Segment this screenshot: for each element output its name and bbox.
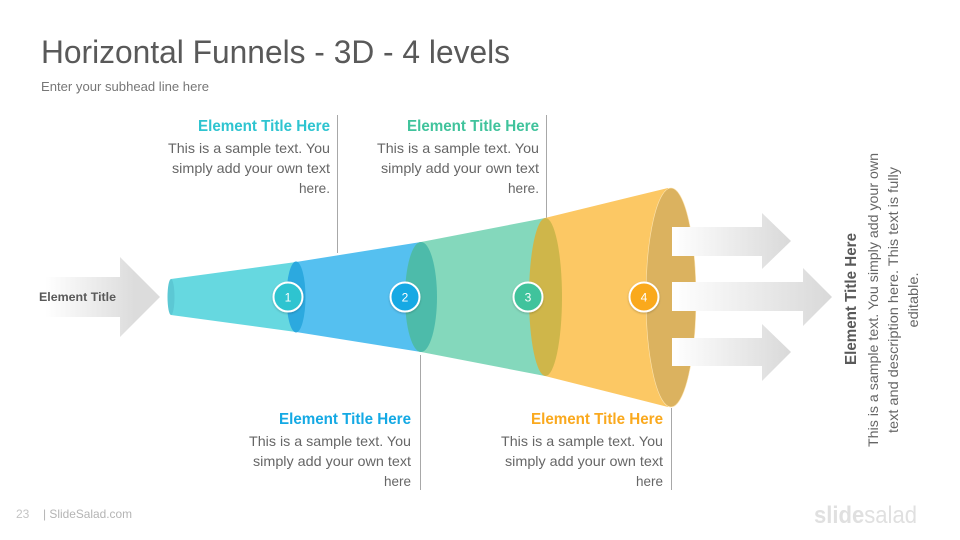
text block 4: simply add your own text <box>505 453 663 469</box>
step badge 1: 1 <box>285 290 292 304</box>
output arrow bottom <box>672 324 791 381</box>
title: Horizontal Funnels - 3D - 4 levels <box>41 34 510 70</box>
funnel ring 1 <box>286 262 306 332</box>
page number: 23 <box>16 507 30 521</box>
text block 4: here <box>636 473 663 489</box>
input arrow <box>39 257 160 337</box>
step badge 4 <box>630 282 658 312</box>
text block 1: here. <box>299 180 330 196</box>
funnel ring 2 <box>405 242 437 352</box>
funnel segment 2 <box>296 242 421 352</box>
text block 3: This is a sample text. You <box>377 140 539 156</box>
funnel opening 0 <box>168 279 174 315</box>
text block 1: Element Title Here <box>198 118 330 135</box>
rotated output text: Element Title Here <box>843 233 860 365</box>
output arrow top <box>672 213 791 269</box>
text block 2: Element Title Here <box>279 411 411 428</box>
text block 1: This is a sample text. You <box>168 140 330 156</box>
text block 2 <box>249 411 411 489</box>
text block 3: simply add your own text <box>381 160 539 176</box>
step badge 3: 3 <box>525 290 532 304</box>
step badge 3 <box>514 282 542 312</box>
footer source: | SlideSalad.com <box>43 507 132 521</box>
step badge 2: 2 <box>402 290 409 304</box>
funnel segment 3 <box>421 218 545 376</box>
output arrow middle <box>672 268 832 326</box>
step badge 2 <box>390 282 420 312</box>
funnel segment 4 <box>545 188 668 407</box>
text block 2: here <box>384 473 411 489</box>
text block 3: here. <box>508 180 539 196</box>
text block 3 <box>377 118 539 196</box>
text block 4: This is a sample text. You <box>501 433 663 449</box>
text block 2: simply add your own text <box>253 453 411 469</box>
funnel ring 3 <box>529 218 562 376</box>
leader lines <box>338 115 672 490</box>
text block 3: Element Title Here <box>407 118 539 135</box>
rotated output text: This is a sample text. You simply add your own <box>865 153 881 447</box>
step badge 4: 4 <box>641 290 648 304</box>
step badge 1 <box>274 282 302 312</box>
text block 4 <box>501 411 663 489</box>
input arrow label: Element Title <box>39 290 116 304</box>
funnel mouth <box>646 188 696 407</box>
rotated output text: editable. <box>905 272 921 328</box>
text block 4: Element Title Here <box>531 411 663 428</box>
text block 1: simply add your own text <box>172 160 330 176</box>
funnel <box>168 188 696 407</box>
rotated output text <box>843 153 921 447</box>
subhead: Enter your subhead line here <box>41 80 209 94</box>
text block 1 <box>168 118 330 196</box>
logo: slidesalad <box>814 502 917 529</box>
rotated output text: text and description here. This text is fully <box>885 167 901 433</box>
funnel segment 1 <box>171 262 296 332</box>
text block 2: This is a sample text. You <box>249 433 411 449</box>
